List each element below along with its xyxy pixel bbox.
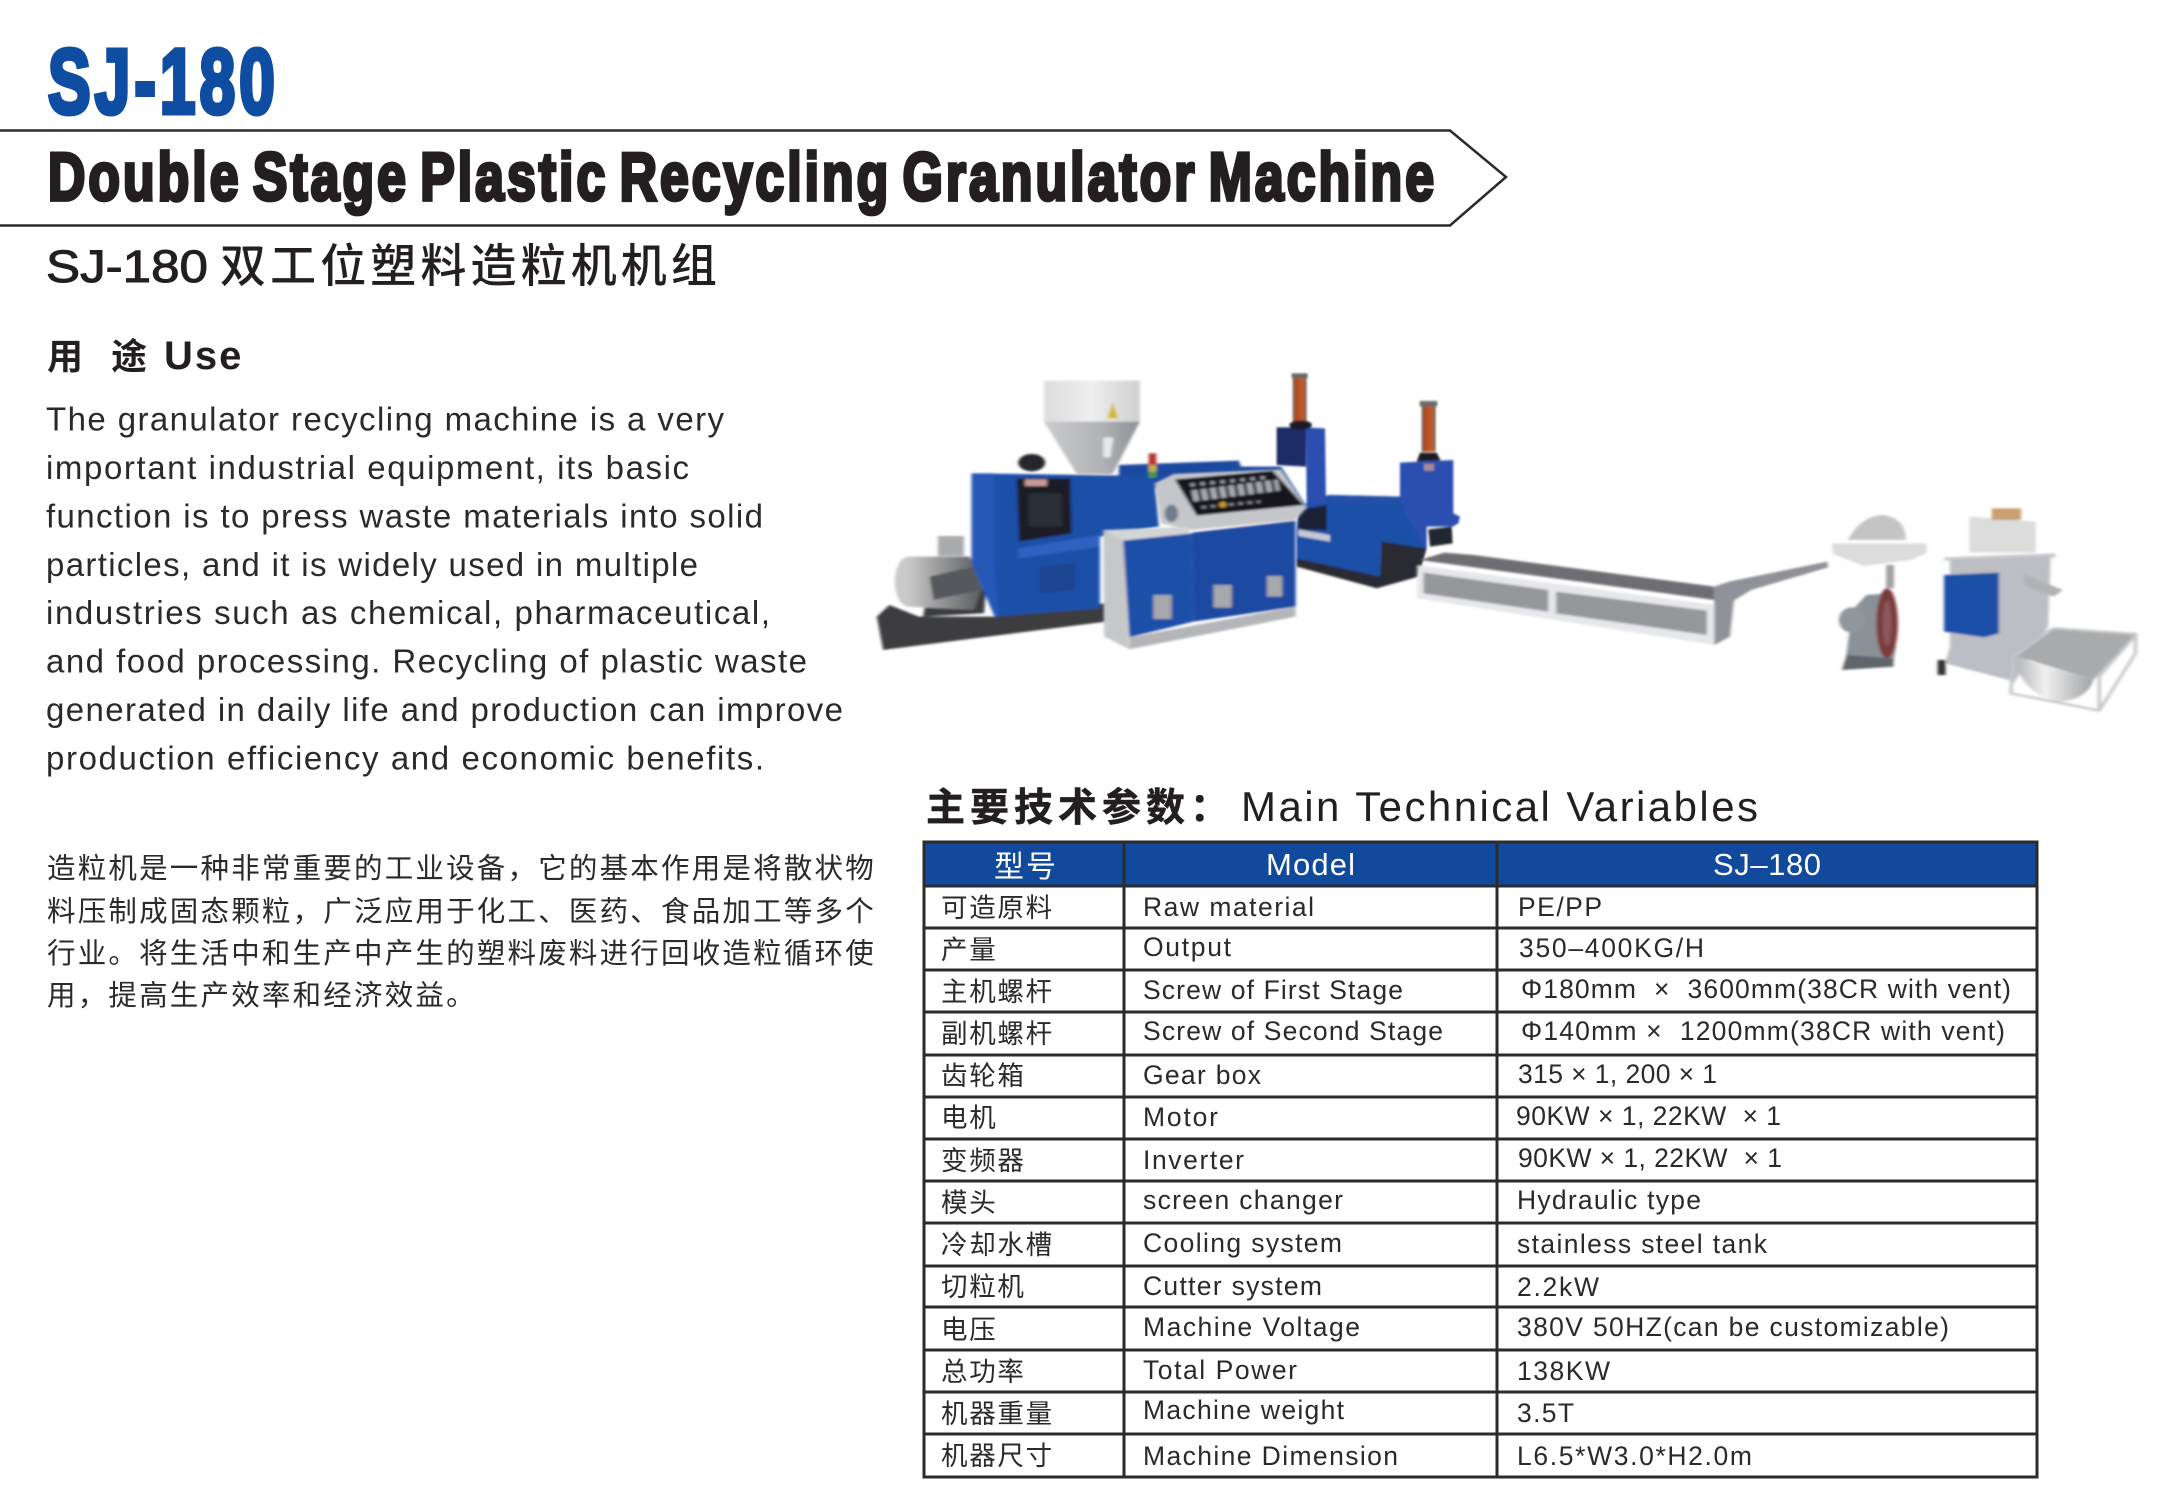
illustration: second stage extruder bbox=[1277, 373, 1460, 588]
control panel bbox=[1155, 469, 1307, 530]
column 1: Chinese parameter names: 副机螺杆 bbox=[941, 1019, 1054, 1049]
column 1: Chinese parameter names: 齿轮箱 bbox=[941, 1061, 1026, 1091]
column 1: Chinese parameter names: 机器重量 bbox=[941, 1399, 1054, 1429]
text block: English description: production efficiency and economic benefits. bbox=[46, 739, 764, 776]
column 1: Chinese parameter names bbox=[941, 893, 1054, 1471]
text block: English description: particles, and it is widely used in multiple bbox=[46, 546, 698, 583]
column 2: English parameter names: Screw of First Stage bbox=[1143, 975, 1403, 1005]
table: technical parameters bbox=[924, 842, 2037, 1477]
text block: English description: and food processing. Recycling of plastic waste bbox=[46, 643, 807, 680]
heading: main technical variables: 主要技术参数： bbox=[926, 787, 1234, 830]
illustration: cooling tank, fan and cutter bbox=[1417, 508, 2136, 711]
heading: use: 途 bbox=[111, 336, 147, 377]
text block: English description: generated in daily life and production can improve bbox=[46, 691, 843, 728]
subtitle: Chinese machine name: 双工位塑料造粒机机组 bbox=[220, 240, 721, 292]
back barrel bbox=[1119, 461, 1306, 507]
column 3: SJ-180 values: 350–400KG/H bbox=[1519, 933, 1704, 963]
title: SJ-180: SJ-180 bbox=[48, 31, 279, 133]
column 3: SJ-180 values: 90KW × 1, 22KW × 1 bbox=[1518, 1143, 1782, 1173]
column 3: SJ-180 values: 90KW × 1, 22KW × 1 bbox=[1516, 1101, 1781, 1131]
column 3: SJ-180 values: 380V 50HZ(can be customizable) bbox=[1517, 1312, 1949, 1342]
hydraulic cylinders bbox=[1289, 373, 1441, 462]
text block: Chinese description: 用，提高生产效率和经济效益。 bbox=[47, 980, 477, 1012]
column 3: SJ-180 values: 138KW bbox=[1517, 1356, 1610, 1386]
cooling water tank bbox=[1417, 553, 1828, 645]
base frame bbox=[877, 603, 1106, 650]
column 2: English parameter names: Motor bbox=[1143, 1102, 1218, 1132]
text block: English description: important industrial equipment, its basic bbox=[46, 449, 689, 486]
column 1: Chinese parameter names: 切粒机 bbox=[941, 1272, 1026, 1302]
column 2: English parameter names: Output bbox=[1143, 932, 1232, 962]
column 3: SJ-180 values: 2.2kW bbox=[1517, 1272, 1599, 1302]
column 3: SJ-180 values: PE/PP bbox=[1518, 892, 1602, 922]
column 3: SJ-180 values: Φ140mm × 1200mm(38CR with vent) bbox=[1521, 1016, 2005, 1046]
text block: Chinese description: 行业。将生活中和生产中产生的塑料废料进行回收造粒循环使 bbox=[47, 938, 876, 970]
column 1: Chinese parameter names: 可造原料 bbox=[941, 893, 1054, 923]
column 1: Chinese parameter names: 电机 bbox=[941, 1103, 997, 1133]
column 3: SJ-180 values: stainless steel tank bbox=[1517, 1229, 1768, 1259]
pellet hopper bbox=[2011, 628, 2136, 711]
column 2: English parameter names: Cutter system bbox=[1143, 1271, 1322, 1301]
column 3: SJ-180 values: Φ180mm × 3600mm(38CR with vent) bbox=[1521, 974, 2011, 1004]
column 2: English parameter names: Machine Voltage bbox=[1143, 1312, 1360, 1342]
text block: English description: The granulator recycling machine is a very bbox=[46, 400, 724, 438]
text block: English description bbox=[46, 400, 843, 776]
column 2: English parameter names: Machine Dimension bbox=[1143, 1441, 1398, 1471]
base bbox=[1297, 542, 1427, 588]
heading: use bbox=[47, 334, 243, 378]
knob bbox=[1018, 454, 1045, 471]
heading: machine name: Double Stage Plastic Recycling Granulator Machine bbox=[48, 139, 1437, 215]
column 3: SJ-180 values: Hydraulic type bbox=[1517, 1185, 1701, 1215]
column 3: SJ-180 values: L6.5*W3.0*H2.0m bbox=[1517, 1441, 1752, 1471]
column 1: Chinese parameter names: 总功率 bbox=[941, 1357, 1026, 1387]
column 2: English parameter names: Cooling system bbox=[1143, 1228, 1342, 1258]
column 3: SJ-180 values: 315 × 1, 200 × 1 bbox=[1518, 1059, 1717, 1089]
text block: English description: function is to press waste materials into solid bbox=[46, 497, 763, 534]
text block: Chinese description: 造粒机是一种非常重要的工业设备，它的基本作用是将散状物 bbox=[47, 853, 876, 885]
black drive panel bbox=[1017, 478, 1072, 542]
text block: English description: industries such as chemical, pharmaceutical, bbox=[46, 594, 770, 631]
column 2: English parameter names: Screw of Second Stage bbox=[1143, 1016, 1443, 1046]
column 1: Chinese parameter names: 机器尺寸 bbox=[941, 1441, 1054, 1471]
column 1: Chinese parameter names: 主机螺杆 bbox=[941, 977, 1054, 1007]
column 2: English parameter names: screen changer bbox=[1143, 1185, 1343, 1215]
column 2: English parameter names: Gear box bbox=[1143, 1060, 1261, 1090]
rear column bbox=[1277, 427, 1306, 467]
table header: Model bbox=[1266, 847, 1355, 882]
table header: SJ–180 bbox=[1713, 847, 1821, 882]
pelletizer cutter bbox=[1938, 508, 2063, 683]
column 2: English parameter names: Machine weight bbox=[1143, 1395, 1345, 1425]
column 2: English parameter names bbox=[1143, 892, 1443, 1471]
cabinet bbox=[1103, 521, 1296, 649]
column 1: Chinese parameter names: 模头 bbox=[941, 1188, 997, 1218]
column 2: English parameter names: Inverter bbox=[1143, 1145, 1244, 1175]
pillar right bbox=[1400, 460, 1460, 548]
subtitle: Chinese machine name: SJ-180 bbox=[46, 241, 208, 292]
text block: Chinese description: 料压制成固态颗粒，广泛应用于化工、医药、食品加工等多个 bbox=[47, 896, 876, 928]
heading: use: 用 bbox=[47, 336, 83, 377]
body bbox=[1297, 495, 1427, 578]
column 1: Chinese parameter names: 产量 bbox=[941, 935, 997, 965]
motor bbox=[895, 536, 986, 617]
banner arrow outline bbox=[0, 130, 1506, 226]
illustration: first extruder bbox=[877, 381, 1306, 650]
heading: main technical variables: Main Technical Variables bbox=[1241, 783, 1758, 830]
table header: 型号 bbox=[994, 851, 1058, 884]
blower fan bbox=[1832, 515, 1926, 670]
column 3: SJ-180 values: 3.5T bbox=[1517, 1398, 1574, 1428]
table header bbox=[924, 842, 2037, 886]
column 1: Chinese parameter names: 冷却水槽 bbox=[941, 1230, 1054, 1260]
signal light bbox=[1149, 453, 1156, 478]
column 1: Chinese parameter names: 电压 bbox=[941, 1315, 997, 1345]
hopper bbox=[1044, 381, 1140, 474]
heading: use: Use bbox=[164, 334, 243, 378]
pillar left bbox=[1306, 427, 1326, 505]
text block: Chinese description bbox=[47, 853, 876, 1012]
heading: main technical variables bbox=[926, 783, 1758, 830]
column 2: English parameter names: Raw material bbox=[1143, 892, 1314, 922]
main extruder body bbox=[972, 473, 1159, 617]
column 3: SJ-180 values bbox=[1516, 892, 2011, 1471]
illustration: control panel and cabinet bbox=[1103, 469, 1307, 649]
column 1: Chinese parameter names: 变频器 bbox=[941, 1146, 1026, 1176]
column 2: English parameter names: Total Power bbox=[1143, 1355, 1297, 1385]
